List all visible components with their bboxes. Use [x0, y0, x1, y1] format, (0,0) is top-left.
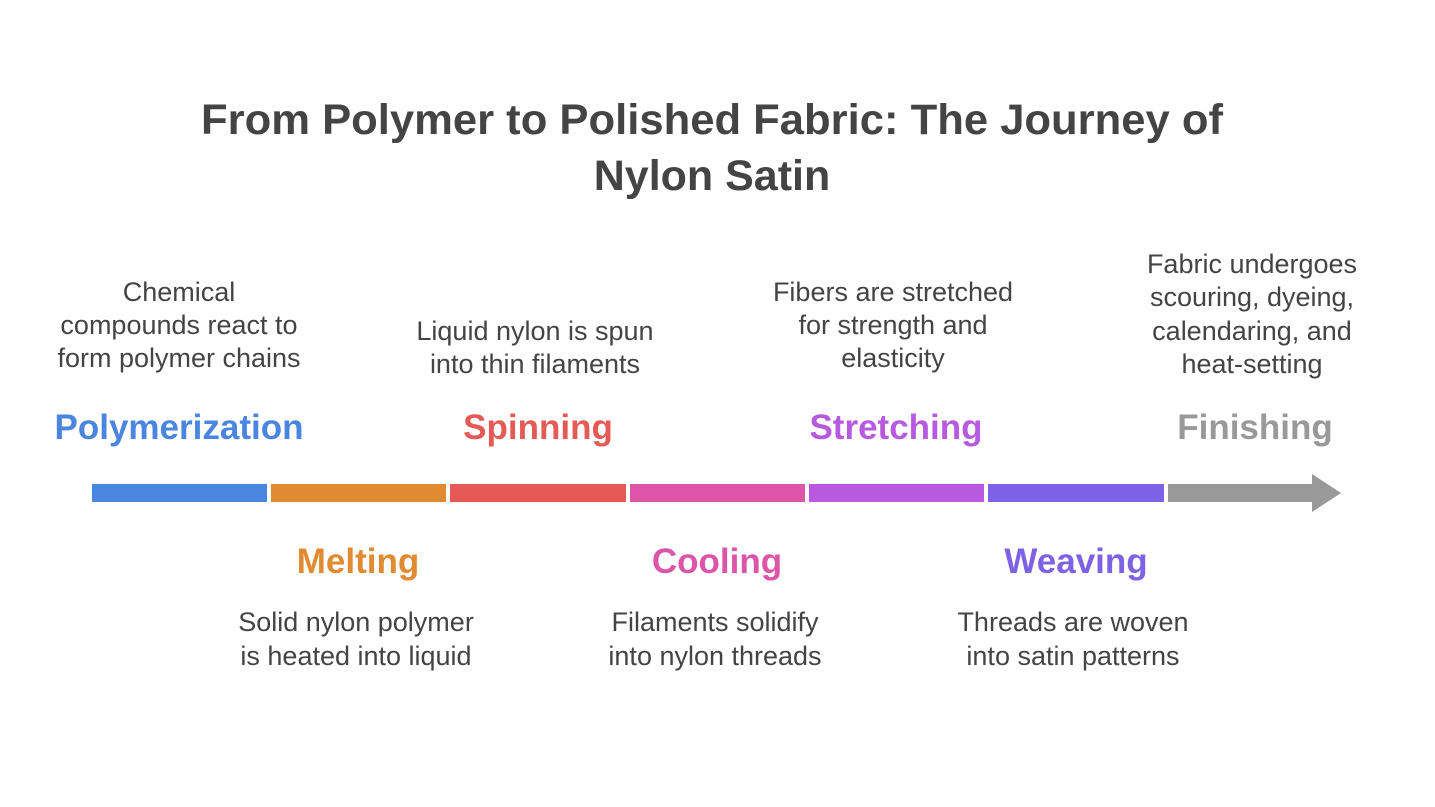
step: Stretching: elasticity: [841, 343, 945, 373]
step: Cooling: Cooling: [652, 542, 782, 581]
step: Finishing: heat-setting: [1181, 349, 1323, 379]
step: Polymerization: compounds react to: [60, 310, 298, 340]
step: Polymerization: [55, 277, 303, 447]
step: Spinning: Spinning: [463, 408, 613, 447]
step: Finishing: Finishing: [1177, 408, 1333, 447]
title: From Polymer to Polished Fabric: The Journey of: [201, 96, 1224, 144]
step: Weaving: [957, 542, 1189, 671]
step: Cooling: into nylon threads: [608, 641, 822, 671]
step: Weaving: into satin patterns: [966, 641, 1180, 671]
step: Polymerization: form polymer chains: [57, 343, 301, 373]
timeline bar: [92, 474, 1341, 512]
step: Melting: Solid nylon polymer: [238, 607, 474, 637]
step: Finishing: [1147, 249, 1357, 447]
step: Cooling: Filaments solidify: [611, 607, 819, 637]
title: Nylon Satin: [594, 152, 830, 200]
step: Spinning: [416, 316, 654, 447]
step: Cooling: [608, 542, 822, 671]
title: [201, 96, 1224, 200]
step: Polymerization: Chemical: [123, 277, 235, 307]
step: Finishing: scouring, dyeing,: [1150, 282, 1354, 312]
step: Stretching: [773, 277, 1013, 447]
step: Stretching: Fibers are stretched: [773, 277, 1013, 307]
step: Finishing: calendaring, and: [1152, 316, 1352, 346]
step: Melting: Melting: [297, 542, 419, 581]
step: Stretching: for strength and: [798, 310, 988, 340]
step: Finishing: Fabric undergoes: [1147, 249, 1357, 279]
step: Polymerization: Polymerization: [55, 408, 303, 447]
step: Melting: [238, 542, 474, 671]
step: Weaving: Weaving: [1004, 542, 1148, 581]
step: Weaving: Threads are woven: [957, 607, 1189, 637]
step: Spinning: into thin filaments: [430, 349, 640, 379]
step: Spinning: Liquid nylon is spun: [416, 316, 654, 346]
step: Melting: is heated into liquid: [240, 641, 472, 671]
step: Stretching: Stretching: [809, 408, 983, 447]
arrow head: [1168, 474, 1341, 512]
